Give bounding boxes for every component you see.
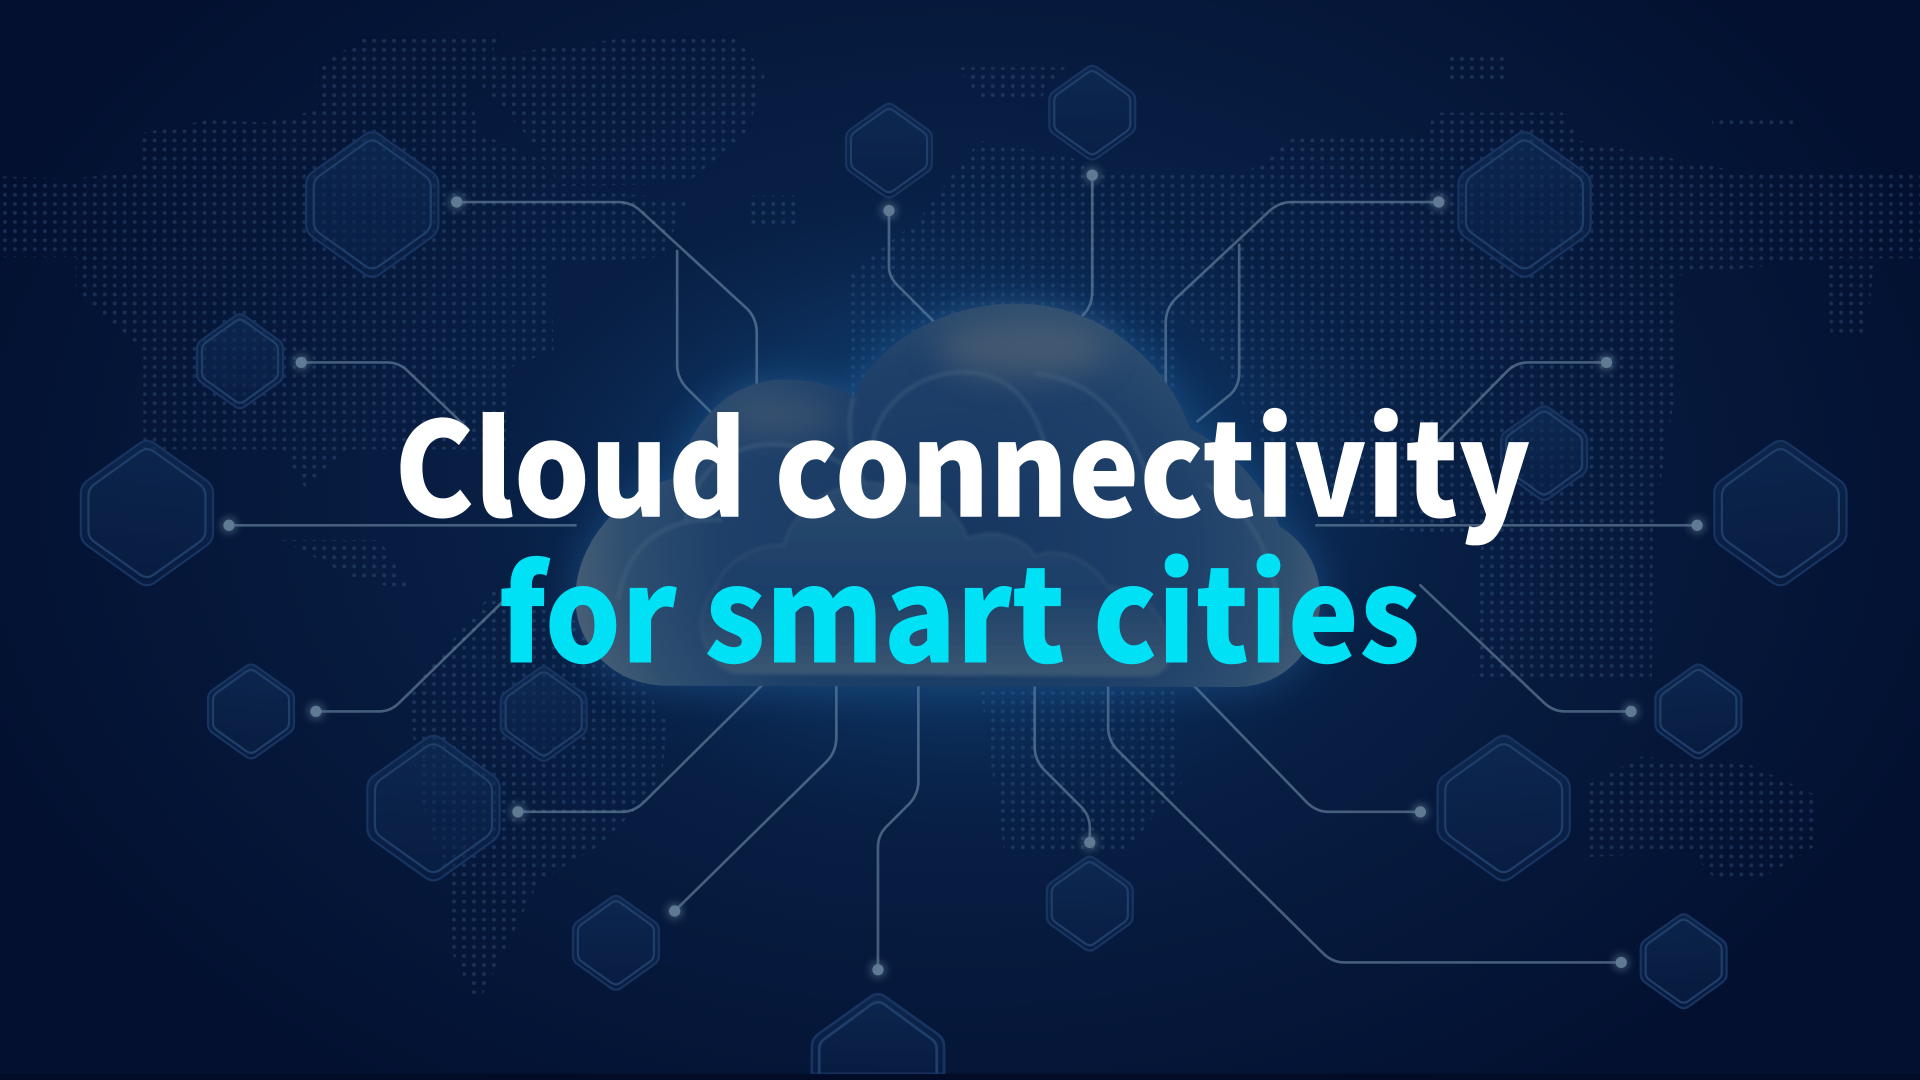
- front cloud: [702, 482, 1171, 676]
- cloud left lobe highlight: [729, 397, 839, 436]
- hexagon: left upper small: [197, 314, 283, 408]
- cloud inner lobes: [618, 372, 1280, 637]
- hexagon: top left large: [306, 132, 438, 277]
- cloud illustration: [575, 304, 1320, 687]
- hexagon: top small left: [846, 104, 932, 198]
- bottom dark strip: [0, 1074, 1920, 1080]
- hexagon: centre left small: [501, 667, 587, 761]
- title line 2: for smart cities: [498, 510, 1420, 700]
- hexagon: lower right large: [1438, 736, 1570, 880]
- hexagon: right large: [1714, 441, 1847, 585]
- hexagon: bottom centre small: [1047, 857, 1133, 951]
- hexagon: bottom left small: [573, 896, 659, 990]
- hexagon: top small right: [1049, 66, 1135, 160]
- title: [394, 365, 1531, 700]
- hexagon: top right large: [1458, 132, 1591, 277]
- title line 1: Cloud connectivity: [394, 365, 1531, 555]
- cloud glow: [478, 184, 1457, 845]
- hexagon: lower left large: [367, 736, 500, 880]
- connector end dots: [220, 167, 1706, 978]
- circuit connector lines: [229, 175, 1697, 970]
- hexagon: left large: [81, 441, 213, 585]
- cloud dome highlight: [937, 320, 1108, 378]
- hexagon: right upper small: [1501, 406, 1587, 500]
- hexagon: left lower small: [208, 664, 294, 758]
- hexagon: right lower small: [1655, 664, 1741, 758]
- hexagon: bottom centre large, cut off by the page edge: [812, 994, 944, 1074]
- hexagon: bottom right small: [1641, 914, 1727, 1008]
